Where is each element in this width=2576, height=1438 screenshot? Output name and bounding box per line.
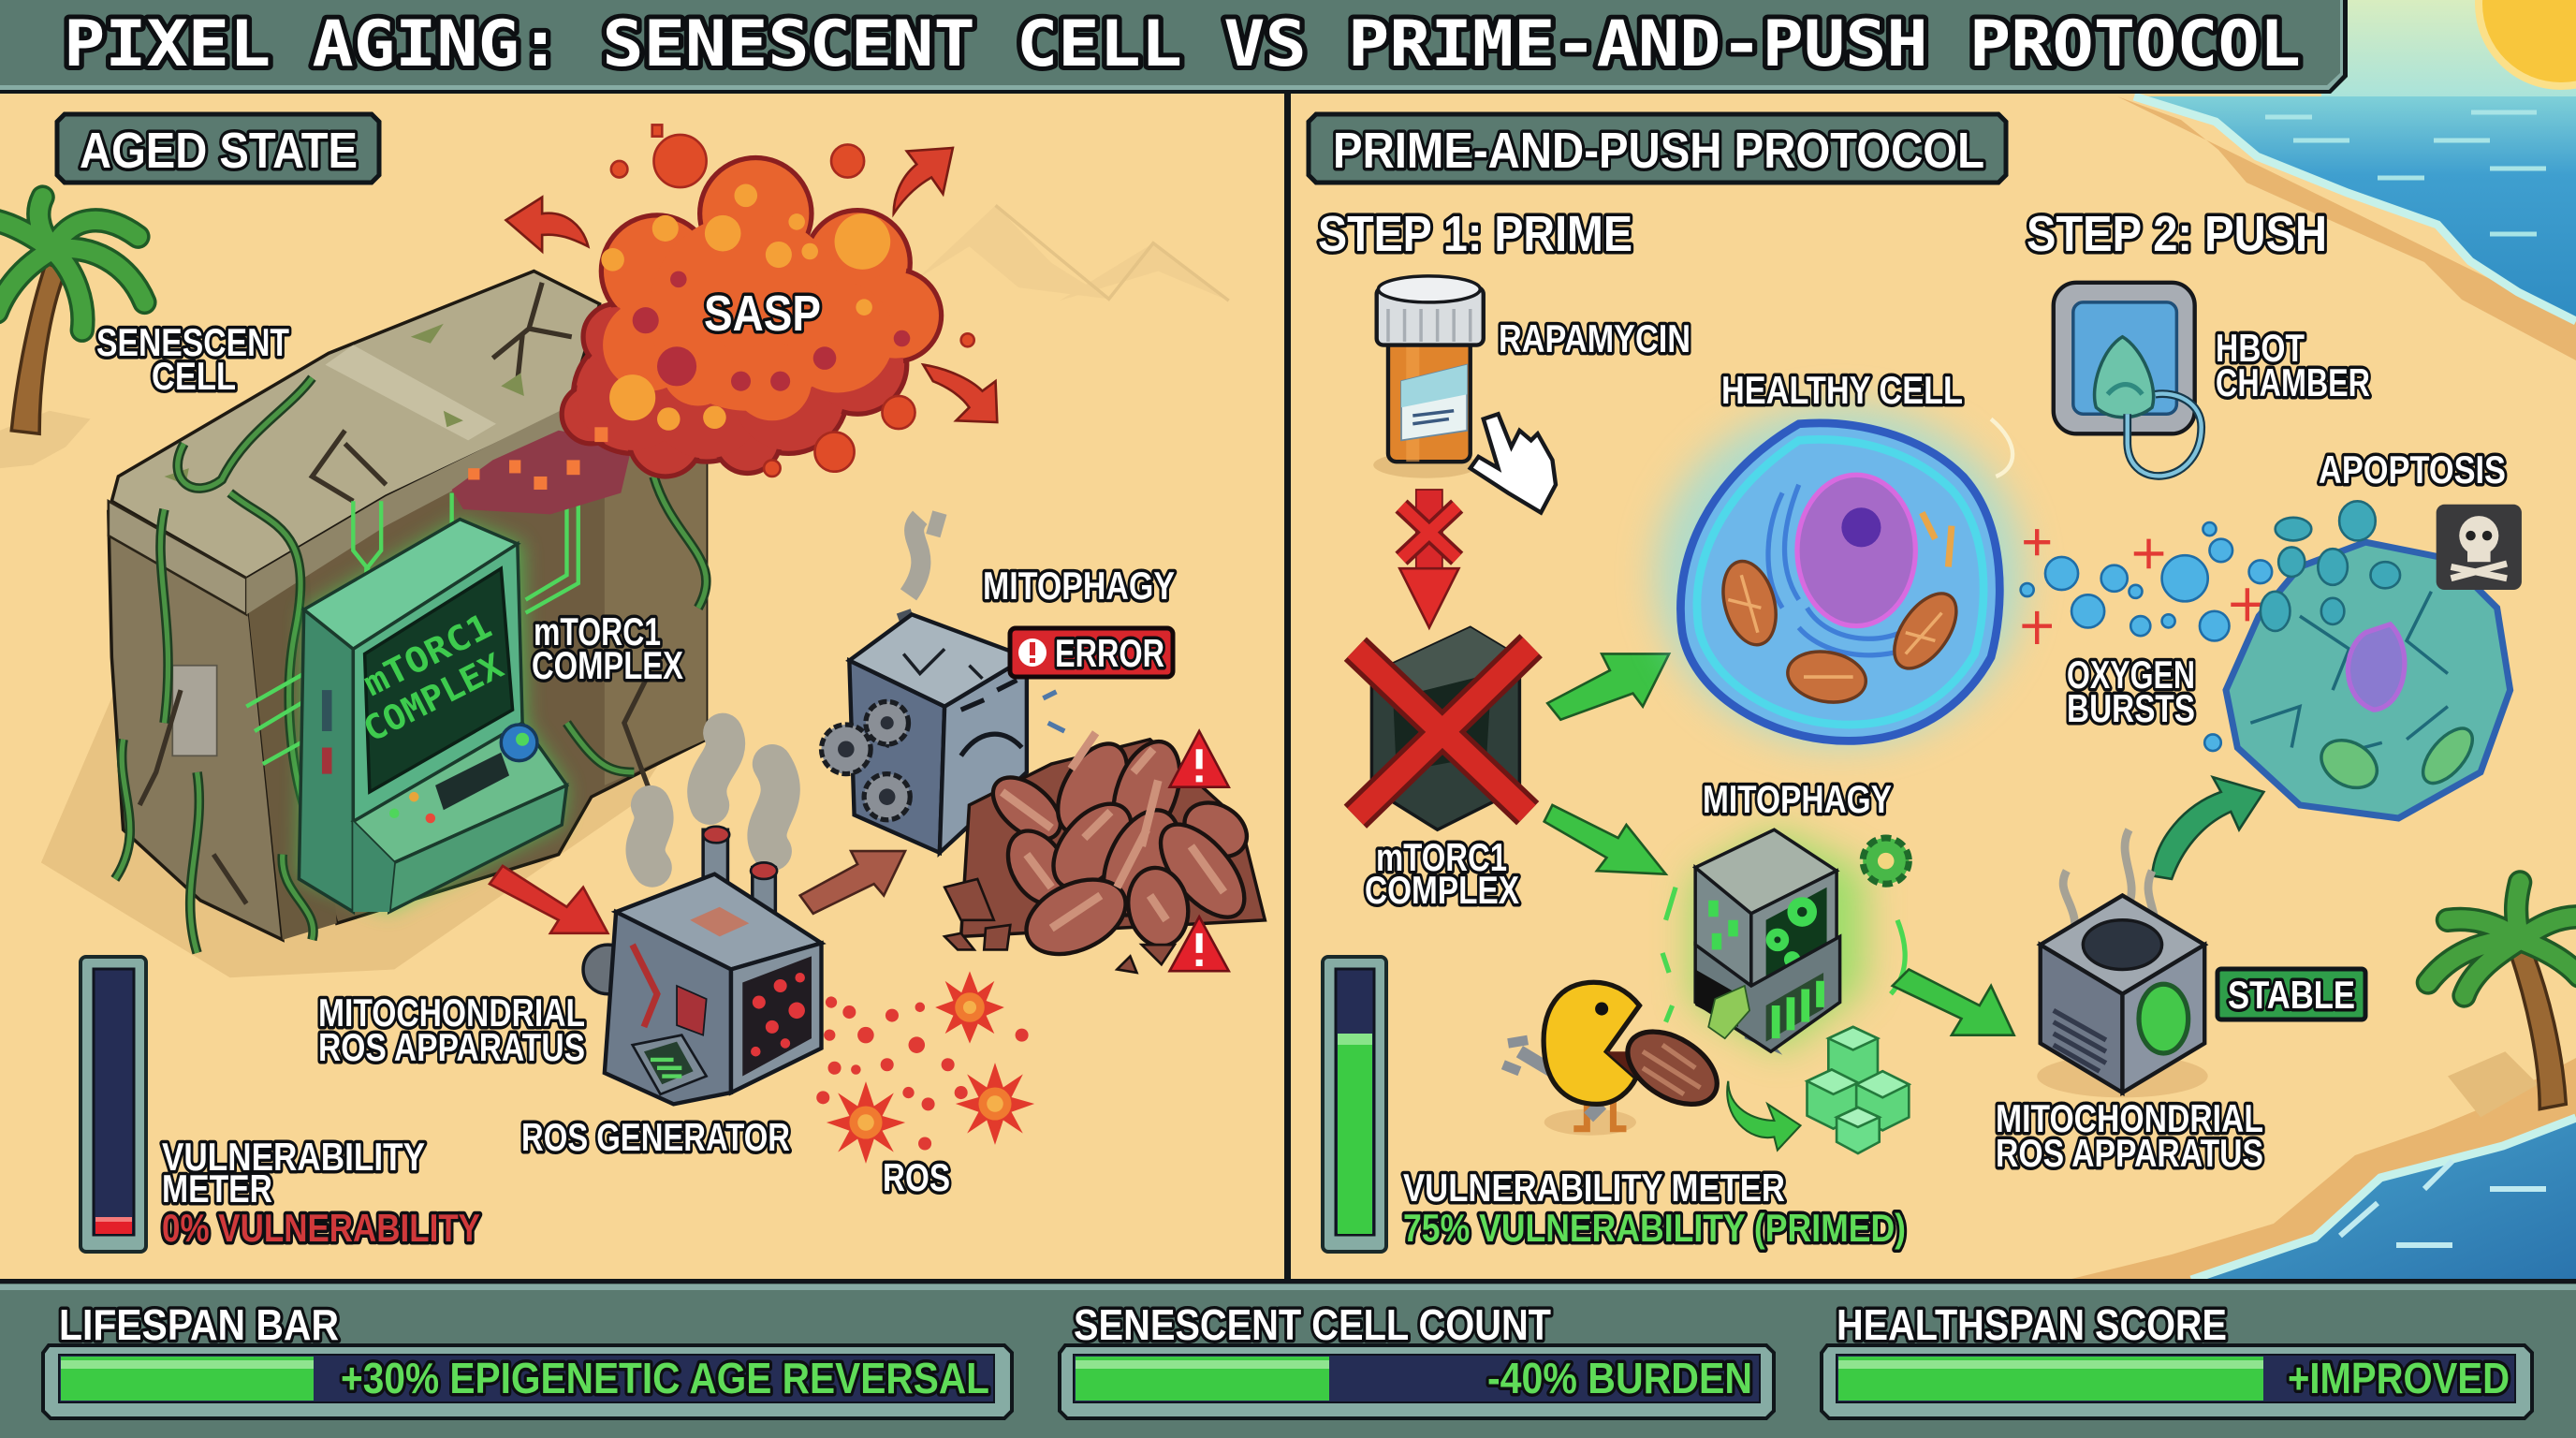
label: SASP: SASP [704, 286, 821, 342]
label: lifespan bar: LIFESPAN BAR [59, 1300, 339, 1349]
palm tree: left [0, 198, 144, 468]
ROS burst lower right [956, 1063, 1034, 1145]
icon: blocked red arrow [1399, 490, 1458, 627]
title: PIXEL AGING: SENESCENT CELL VS PRIME-AND-PUSH PROTOCOL [64, 7, 2301, 81]
badge: stable: STABLE [2228, 973, 2355, 1017]
label: apoptosis: APOPTOSIS [2319, 448, 2506, 492]
arrow: stable box to apoptosis [2152, 777, 2263, 879]
vulnerability meter: primed [1323, 957, 1386, 1252]
footer panel [0, 1279, 2576, 1438]
label: HBOT chamber [2216, 326, 2370, 404]
label: mTORC1 complex primed: mTORC1 [1376, 835, 1507, 879]
stat: senescent cell count [1060, 1300, 1774, 1418]
icon: warning triangle lower [1170, 917, 1229, 971]
vines [115, 378, 706, 953]
label: mitochondrial ROS apparatus stable: ROS APPARATUS [1996, 1131, 2263, 1175]
label: mitochondrial ROS apparatus aged: ROS APPARATUS [318, 1025, 585, 1069]
label: mitochondrial ROS apparatus stable [1996, 1096, 2263, 1175]
arrows: SASP spreading [506, 148, 997, 422]
illustration: stable mitochondrial apparatus [2037, 829, 2208, 1097]
badge: aged state: AGED STATE [80, 123, 358, 179]
icon: warning triangle upper [1170, 731, 1229, 787]
label: vulnerability meter primed: VULNERABILITY METER [1403, 1166, 1785, 1210]
illustration: blocked mTORC1 computer [1355, 627, 1531, 829]
illustration: SASP explosion cloud [452, 125, 974, 514]
ROS burst upper [935, 971, 1004, 1044]
label: vulnerability meter aged: 0% VULNERABILITY [162, 1206, 480, 1250]
ROS burst lower left [827, 1081, 905, 1164]
icon: pointer hand cursor [1471, 414, 1556, 513]
illustration: healthy cell [1656, 405, 2024, 744]
stat: lifespan bar [43, 1300, 1012, 1418]
moss [165, 324, 524, 485]
label: oxygen bursts: OXYGEN [2067, 653, 2195, 697]
label: mitophagy primed: MITOPHAGY [1703, 777, 1892, 821]
header banner [0, 0, 2348, 94]
faint mountains [916, 205, 1229, 301]
illustration: mTORC1 computer: COMPLEX [357, 646, 510, 750]
oxygen bubbles and sparkles [2021, 522, 2272, 751]
label: vulnerability meter aged: VULNERABILITY [162, 1135, 425, 1179]
label: HBOT chamber: CHAMBER [2216, 360, 2370, 404]
illustration: mitophagy machine [1662, 829, 1909, 1055]
ocean: top right [2117, 96, 2576, 360]
label: ROS generator: ROS GENERATOR [521, 1115, 790, 1159]
heading: step 2: STEP 2: PUSH [2027, 206, 2327, 262]
label: vulnerability meter primed [1403, 1166, 1906, 1250]
illustration: broken mitophagy machine with smoke [822, 513, 1064, 853]
heading: step 1: STEP 1: PRIME [1318, 206, 1632, 262]
label: mitochondrial ROS apparatus stable: MITOCHONDRIAL [1996, 1096, 2263, 1140]
arrow: mitophagy to stable apparatus [1893, 969, 2014, 1035]
circuit traces [246, 492, 578, 764]
label: mTORC1 complex aged: mTORC1 [534, 609, 661, 653]
label: vulnerability meter primed: 75% VULNERABILITY (PRIMED) [1403, 1206, 1906, 1250]
value: burden: -40% BURDEN [1487, 1354, 1752, 1402]
ocean: bottom right [2068, 1058, 2576, 1280]
badge: error [1010, 628, 1173, 677]
illustration: ROS generator machine [583, 827, 822, 1104]
arrow: small curved green to cubes [1727, 1081, 1800, 1150]
illustration: pac-man eating mitochondrion with wrench [1503, 982, 1730, 1136]
illustration: mTORC1 computer: mTORC1 [357, 606, 498, 704]
arrow: ROS generator to mitophagy [800, 851, 905, 914]
value: improved: +IMPROVED [2288, 1354, 2510, 1402]
label: mTORC1 complex primed: COMPLEX [1365, 868, 1519, 912]
smoke: ROS generator [646, 733, 781, 868]
label: healthy cell: HEALTHY CELL [1721, 368, 1963, 412]
vulnerability meter: aged [80, 957, 146, 1252]
arrows: green from blocked mTORC1 [1544, 653, 1669, 874]
panel divider [1284, 94, 1291, 1281]
arrow: mTORC1 to ROS generator [490, 866, 607, 933]
illustration: senescent cell ruin [41, 271, 707, 977]
label: ROS: ROS [883, 1155, 950, 1199]
label: oxygen bursts: BURSTS [2067, 686, 2195, 730]
illustration: HBOT chamber [2054, 283, 2202, 476]
badge: prime-and-push protocol: PRIME-AND-PUSH PROTOCOL [1333, 123, 1984, 179]
sky and sun [2321, 0, 2576, 105]
illustration: rapamycin pill bottle [1373, 276, 1484, 478]
label: oxygen bursts [2067, 653, 2195, 730]
label: senescent cell: CELL [152, 354, 236, 398]
label: HBOT chamber: HBOT [2216, 326, 2305, 370]
label: healthspan score: HEALTHSPAN SCORE [1837, 1300, 2227, 1349]
illustration: damaged mitochondria pile [944, 732, 1265, 973]
value: epigenetic age reversal: +30% EPIGENETIC AGE REVERSAL [341, 1354, 989, 1402]
label: vulnerability meter aged: METER [162, 1167, 272, 1211]
palm tree: right [2428, 882, 2576, 1117]
label: vulnerability meter aged [162, 1135, 480, 1250]
stat: healthspan score [1822, 1300, 2532, 1418]
label: mitochondrial ROS apparatus aged [318, 990, 585, 1069]
badge: error: ERROR [1055, 631, 1164, 675]
label: mitochondrial ROS apparatus aged: MITOCHONDRIAL [318, 990, 585, 1034]
label: mitophagy aged: MITOPHAGY [983, 564, 1175, 608]
label: senescent cell [96, 320, 289, 398]
label: mTORC1 complex aged [532, 609, 683, 687]
cracks [139, 283, 649, 903]
label: senescent cell: SENESCENT [96, 320, 289, 364]
illustration: apoptosis cell [2226, 501, 2510, 818]
label: senescent cell count: SENESCENT CELL COUNT [1074, 1300, 1551, 1349]
illustration: mTORC1 computer [246, 492, 578, 912]
illustration: green recycled cubes [1807, 1027, 1909, 1153]
ROS particles [816, 996, 1029, 1150]
icon: skull and crossbones [2437, 505, 2522, 590]
label: rapamycin: RAPAMYCIN [1499, 316, 1690, 360]
label: mTORC1 complex primed [1365, 835, 1519, 912]
label: mTORC1 complex aged: COMPLEX [532, 643, 683, 687]
